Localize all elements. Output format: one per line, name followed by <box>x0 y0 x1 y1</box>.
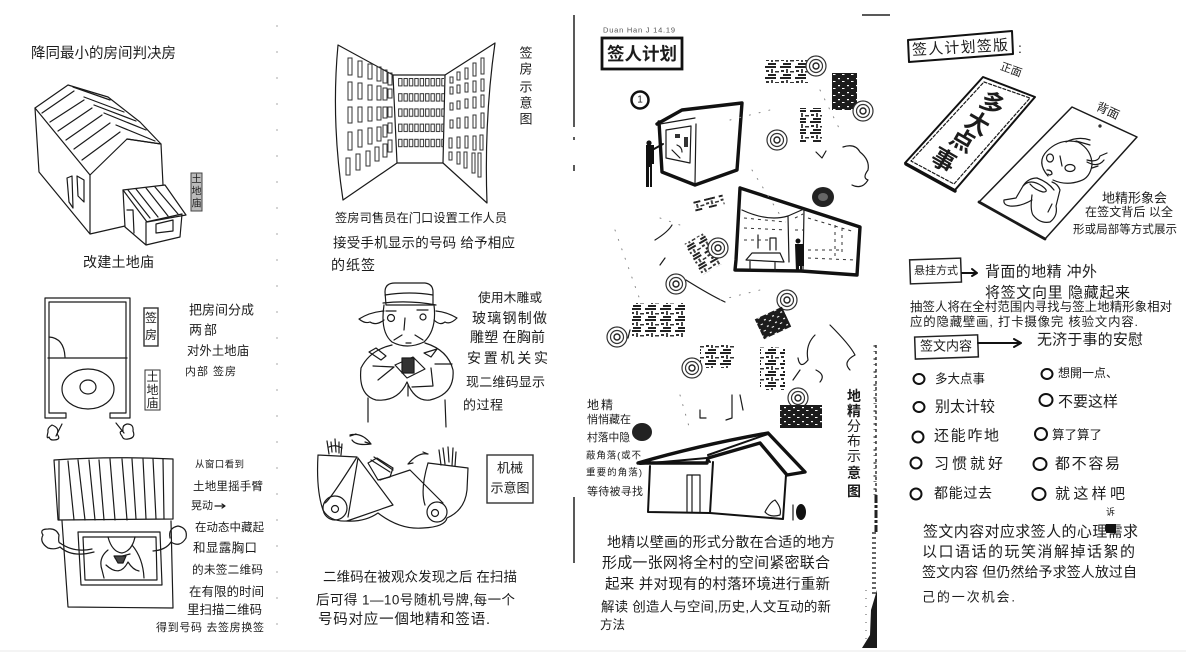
label: gnome hidden in the village <box>586 398 643 498</box>
text: divide the room: 内部 签房 <box>185 364 236 378</box>
label: mechanism diagram: 机械 <box>497 460 523 476</box>
drawing: gnome with hat holding QR <box>359 283 457 427</box>
list: ten slip phrases: 都不容易 <box>1055 456 1120 472</box>
panel: room and shrine design <box>31 25 277 640</box>
drawing: booth with gnome at window <box>42 458 186 608</box>
marker: black gnome circle <box>632 423 652 441</box>
drawing: front of slip with big words <box>905 77 1035 191</box>
text: hanging description: 抽签人将在全村范围内寻找与签上地精形象相对 <box>910 299 1172 314</box>
label: shrine room: 地 <box>146 383 159 397</box>
text: closing paragraph: 以口语话的玩笑消解掉话絮的 <box>922 544 1135 560</box>
drawing: floor plan <box>45 298 134 440</box>
drawing: arm mechanism with rollers <box>318 434 468 528</box>
panel: signature room mechanism <box>316 43 548 628</box>
label: vertical gnome distribution: 精 <box>847 403 861 419</box>
drawing: front of slip with big words: 点 <box>945 123 979 159</box>
marker: number one <box>632 92 648 108</box>
label: vertical gnome distribution: 分 <box>847 418 861 434</box>
text: closing paragraph: 诉 <box>1106 506 1115 517</box>
caption: converted shrine: 改建土地庙 <box>83 254 154 270</box>
text: gnome network paragraph: 方法 <box>600 617 625 632</box>
title box: 签人计划 <box>607 44 677 64</box>
drawing: village house with gnome mural <box>638 433 806 520</box>
panel: signature slip design <box>905 31 1177 604</box>
list: ten slip phrases: 还能咋地 <box>934 428 999 444</box>
label: signature room <box>144 308 158 346</box>
marker: number one: 1 <box>637 94 643 106</box>
faint page edge <box>276 25 278 640</box>
label: gnome hidden in the village: 蔽角落(或不 <box>586 450 641 462</box>
text: useless comfort: 无济于事的安慰 <box>1037 330 1143 348</box>
drawing: signature room courtyard <box>335 43 495 203</box>
text: staff at the door: 接受手机显示的号码 给予相应 <box>333 234 515 250</box>
text: staff at the door: 的纸签 <box>331 257 375 273</box>
label: vertical courtyard label: 签 <box>519 46 533 60</box>
heading box: signature design: 签人计划签版 <box>912 37 1008 59</box>
box: slip content <box>915 335 978 359</box>
list: ten slip phrases: 多大点事 <box>935 372 985 386</box>
text: gnome network paragraph <box>600 534 835 632</box>
scatter: QR codes, spirals and gnomes <box>607 56 873 430</box>
text: wood or fibreglass sculpture: 玻璃钢制做 <box>472 310 547 326</box>
label: back: 背面 <box>1094 99 1122 122</box>
text: scan window instructions: 里扫描二维码 <box>187 603 262 617</box>
text: staff at the door: 签房司售员在门口设置工作人员 <box>335 210 507 225</box>
heading: smallest room: 降同最小的房间判决房 <box>31 45 176 62</box>
label: shrine annex: 地 <box>192 184 202 198</box>
text: scan window instructions: 得到号码 去签房换签 <box>156 620 264 634</box>
label: vertical gnome distribution <box>847 388 861 499</box>
text: wood or fibreglass sculpture: 安置机关实 <box>467 350 548 366</box>
box: slip content: 签文内容 <box>920 338 972 354</box>
text: scan window instructions: 的未签二维码 <box>192 562 263 576</box>
label: shrine room: 土 <box>146 370 159 384</box>
label: gnome hidden in the village: 地精 <box>587 398 613 412</box>
decorative: dark scanned page edge <box>862 15 890 648</box>
label: shrine annex <box>191 172 202 211</box>
arrow: hanging method <box>962 269 977 276</box>
text: scan window instructions: 在有限的时间 <box>189 584 264 599</box>
list: ten slip phrases: 不要这样 <box>1058 394 1118 410</box>
label: gnome hidden in the village: 悄悄藏在 <box>587 412 631 426</box>
text: QR and numbers: 号码对应一個地精和签语. <box>318 610 490 628</box>
label: front: 正面 <box>999 61 1023 80</box>
text: gnome network paragraph: 地精以壁画的形式分散在合适的地方 <box>607 534 835 550</box>
label: vertical gnome distribution: 图 <box>847 483 861 499</box>
heading box: signature design <box>908 31 1022 62</box>
text: QR and numbers: 二维码在被观众发现之后 在扫描 <box>323 570 517 584</box>
drawing: open room interior with visitor <box>735 188 860 275</box>
text: hanging description <box>910 264 1172 329</box>
text: closing paragraph: 己的一次机会. <box>922 590 1015 604</box>
divider: centre binding line <box>573 15 575 563</box>
label: vertical courtyard label: 意 <box>519 96 533 110</box>
text: wood or fibreglass sculpture <box>463 290 548 412</box>
text: QR and numbers <box>316 570 517 628</box>
drawing: kiosk with visitor <box>646 103 742 187</box>
label: gnome hidden in the village: 重要的角落) <box>586 466 642 478</box>
label: vertical gnome distribution: 地 <box>847 388 861 404</box>
label: shrine annex: 土 <box>192 172 202 186</box>
label: vertical gnome distribution: 示 <box>847 448 861 464</box>
label: mechanism diagram <box>487 455 533 503</box>
text: staff at the door <box>331 210 515 273</box>
label: shrine annex: 庙 <box>192 196 202 210</box>
text: wood or fibreglass sculpture: 现二维码显示 <box>466 374 545 390</box>
text: closing paragraph <box>922 506 1138 604</box>
drawing: front of slip with big words: 事 <box>926 143 960 179</box>
text: divide the room <box>185 302 254 378</box>
label: signature room: 房 <box>145 327 157 342</box>
heading box: signature design: : <box>1018 40 1022 56</box>
list: ten slip phrases: 算了算了 <box>1052 427 1102 442</box>
text: gnome image on back <box>1073 190 1177 236</box>
text: gnome image on back: 在签文背后 以全 <box>1085 204 1173 219</box>
text: divide the room: 对外土地庙 <box>187 344 249 358</box>
arrow: slip content <box>978 339 1021 347</box>
label: vertical gnome distribution: 布 <box>847 433 861 449</box>
text: scan window instructions <box>156 458 265 634</box>
title box <box>602 38 682 69</box>
drawing: front of slip with big words: 大 <box>960 106 994 142</box>
text: closing paragraph: 签文内容 但仍然给予求签人放过自 <box>922 564 1137 580</box>
text: hanging description: 背面的地精 冲外 <box>985 264 1097 280</box>
list: ten slip phrases: 就这样吧 <box>1055 486 1125 502</box>
list: ten slip phrases <box>910 365 1125 502</box>
small handwritten note: Duan Han J 14.19 <box>603 26 675 34</box>
label: gnome hidden in the village: 等待被寻找 <box>587 484 643 498</box>
text: divide the room: 两部 <box>189 322 217 338</box>
text: gnome image on back: 形或局部等方式展示 <box>1073 222 1177 236</box>
box: hanging method <box>910 258 961 284</box>
text: scan window instructions: 晃动 <box>191 499 213 512</box>
list: ten slip phrases: 都能过去 <box>934 485 992 501</box>
label: signature room: 签 <box>145 310 157 325</box>
box: hanging method: 悬挂方式 <box>914 263 958 277</box>
label: vertical courtyard label: 房 <box>519 62 533 76</box>
list: ten slip phrases: 别太计较 <box>935 398 995 416</box>
text: scan window instructions: 在动态中藏起 <box>195 521 265 534</box>
label: vertical gnome distribution: 意 <box>847 465 861 481</box>
label: shrine room: 庙 <box>146 396 159 410</box>
text: gnome network paragraph: 解读 创造人与空间,历史,人文互动的新 <box>601 600 831 614</box>
text: gnome network paragraph: 起来 并对现有的村落环境进行重新 <box>605 575 830 593</box>
text: divide the room: 把房间分成 <box>189 302 254 318</box>
text: hanging description: 应的隐藏壁画, 打卡摄像完 核验文内容. <box>910 314 1138 329</box>
text: scan window instructions: 土地里摇手臂 <box>193 479 264 493</box>
label: vertical courtyard label: 示 <box>519 80 533 94</box>
label: shrine room <box>145 370 160 410</box>
text: wood or fibreglass sculpture: 的过程 <box>463 398 503 412</box>
label: mechanism diagram: 示意图 <box>490 480 530 496</box>
text: wood or fibreglass sculpture: 使用木雕或 <box>478 290 542 305</box>
label: vertical courtyard label: 图 <box>519 112 533 126</box>
drawing: front of slip with big words: 多 <box>975 86 1009 122</box>
text: wood or fibreglass sculpture: 雕塑 在胸前 <box>470 329 545 345</box>
label: gnome hidden in the village: 村落中隐 <box>587 430 630 444</box>
text: scan window instructions: 从窗口看到 <box>195 458 244 470</box>
text: closing paragraph: 签文内容对应求签人的心理需求 <box>923 522 1138 540</box>
list: ten slip phrases: 习惯就好 <box>934 456 1003 472</box>
text: QR and numbers: 后可得 1—10号随机号牌,每一个 <box>316 592 516 608</box>
text: gnome image on back: 地精形象会 <box>1102 190 1167 206</box>
text: hanging description: 将签文向里 隐藏起来 <box>985 284 1130 302</box>
drawing: house with shrine annex <box>35 85 186 245</box>
panel: signature plan map <box>586 26 873 632</box>
drawing: back of slip with sitting gnome <box>979 107 1137 239</box>
list: ten slip phrases: 想開一点、 <box>1058 365 1118 380</box>
text: gnome network paragraph: 形成一张网将全村的空间紧密联合 <box>602 554 830 572</box>
label: vertical courtyard label <box>519 46 533 126</box>
text: scan window instructions: 和显露胸口 <box>193 540 257 555</box>
